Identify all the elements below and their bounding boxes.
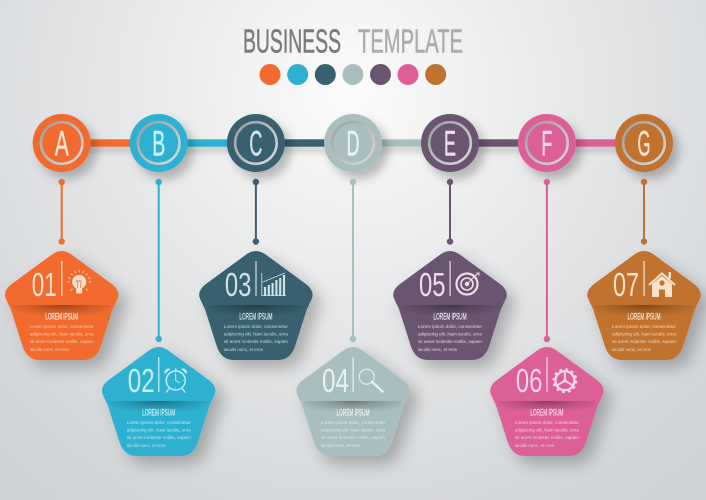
body text: Lorem ipsum dolor, consectetur	[127, 420, 191, 425]
panel: step 01: LOREM IPSUM	[45, 312, 78, 322]
body text: sit amet molestie mollis, sapien	[418, 339, 482, 344]
step circle F: F	[541, 124, 552, 164]
body text: sit amet molestie mollis, sapien	[224, 339, 288, 344]
step circle A: A	[55, 124, 69, 164]
body text: Lorem ipsum dolor, consectetur	[321, 420, 385, 425]
body text: adipiscing elit. Nam iaculis, urna	[612, 332, 676, 337]
icon: target	[456, 272, 480, 294]
panel: step 06: LOREM IPSUM	[530, 408, 563, 418]
panel: step 02	[102, 347, 215, 456]
body text: adipiscing elit. Nam iaculis, urna	[418, 332, 482, 337]
icon: alarm clock	[164, 368, 187, 392]
timeline connecting bars	[62, 139, 644, 147]
step circle C: C	[249, 124, 262, 164]
colour palette dots	[260, 64, 446, 85]
body text: Lorem ipsum dolor, consectetur	[30, 324, 94, 329]
panel: step 03: 03	[225, 266, 251, 303]
panel: step 03: LOREM IPSUM	[239, 312, 272, 322]
connector F to 06	[544, 179, 550, 342]
body text: iaculis nunc, et eros	[418, 347, 458, 352]
body text	[127, 420, 191, 448]
icon: magnifying glass	[359, 369, 382, 392]
step circle D: D	[347, 124, 359, 164]
body text: adipiscing elit. Nam iaculis, urna	[224, 332, 288, 337]
body text: adipiscing elit. Nam iaculis, urna	[127, 428, 191, 433]
step circle F	[518, 114, 576, 172]
panel: step 07: LOREM IPSUM	[628, 312, 660, 322]
panel: step 03	[199, 251, 313, 360]
body text: sit amet molestie mollis, sapien	[612, 339, 676, 344]
body text: adipiscing elit. Nam iaculis, urna	[30, 332, 94, 337]
body text	[224, 324, 288, 352]
title: TEMPLATE	[358, 22, 463, 60]
body text: iaculis nunc, et eros	[30, 347, 69, 352]
body text: iaculis nunc, et eros	[612, 347, 652, 352]
body text: iaculis nunc, et eros	[127, 443, 166, 448]
body text: sit amet molestie mollis, sapien	[127, 435, 191, 440]
panel: step 05: LOREM IPSUM	[434, 312, 466, 322]
panel: step 06	[490, 347, 604, 456]
icon: gear	[553, 369, 576, 392]
body text: adipiscing elit. Nam iaculis, urna	[321, 428, 385, 433]
body text: sit amet molestie mollis, sapien	[515, 435, 579, 440]
panel: step 02: LOREM IPSUM	[142, 408, 175, 418]
step circle E: E	[444, 124, 456, 164]
step circle B: B	[152, 124, 165, 164]
panel: step 07	[587, 251, 701, 360]
icon: light bulb	[67, 270, 91, 294]
panel: step 04: 04	[322, 362, 349, 399]
panel: step 01	[5, 251, 118, 360]
connector D to 04	[350, 179, 356, 342]
body text: Lorem ipsum dolor, consectetur	[418, 324, 482, 329]
body text	[515, 420, 579, 448]
panel: step 06: 06	[516, 362, 542, 399]
body text	[418, 324, 482, 352]
connector A to 01	[58, 179, 65, 245]
panel: step 01: 01	[32, 266, 57, 303]
body text: Lorem ipsum dolor, consectetur	[224, 324, 288, 329]
body text: Lorem ipsum dolor, consectetur	[515, 420, 579, 425]
panel: step 07: 07	[613, 266, 639, 303]
body text	[612, 324, 676, 352]
panel: step 05	[393, 251, 507, 360]
panel: step 05: 05	[419, 266, 445, 303]
step circle A	[33, 114, 91, 172]
step circle G	[615, 114, 673, 172]
body text: adipiscing elit. Nam iaculis, urna	[515, 428, 579, 433]
icon: bar chart	[261, 273, 286, 296]
connector B to 02	[156, 179, 162, 342]
connector G to 07	[641, 179, 647, 245]
step circle E	[421, 114, 479, 172]
body text	[30, 324, 94, 352]
connector C to 03	[253, 179, 259, 245]
body text	[321, 420, 385, 448]
icon: house	[649, 272, 675, 297]
title: BUSINESS	[243, 22, 341, 60]
step circle C	[227, 114, 285, 172]
panel: step 04: LOREM IPSUM	[336, 408, 370, 418]
step circle B	[130, 114, 188, 172]
panel: step 02: 02	[128, 362, 155, 399]
step circle D	[324, 114, 382, 172]
connector E to 05	[447, 179, 453, 245]
body text: iaculis nunc, et eros	[224, 347, 264, 352]
step circle G: G	[638, 124, 650, 164]
body text: Lorem ipsum dolor, consectetur	[612, 324, 676, 329]
body text: sit amet molestie mollis, sapien	[30, 339, 94, 344]
panel: step 04	[296, 347, 410, 456]
body text: iaculis nunc, et eros	[321, 443, 361, 448]
body text: sit amet molestie mollis, sapien	[321, 435, 385, 440]
body text: iaculis nunc, et eros	[515, 443, 555, 448]
